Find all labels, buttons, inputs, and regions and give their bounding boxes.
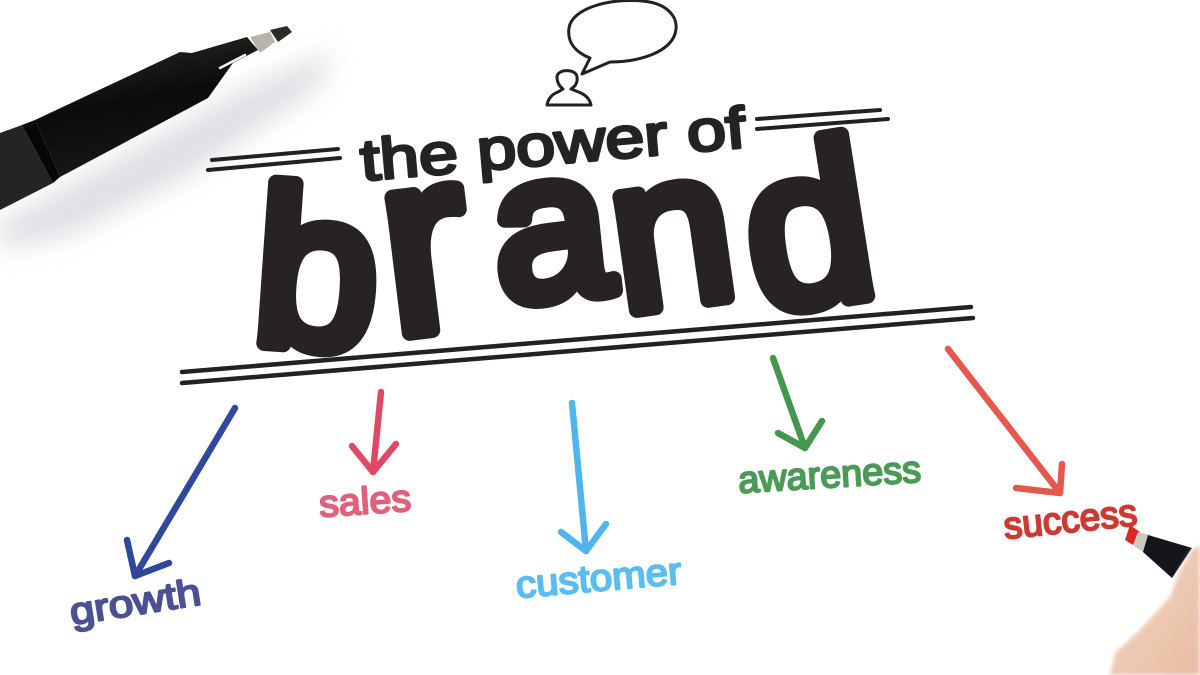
branch: awareness: [737, 358, 922, 502]
heading: the power of: the power of: [358, 95, 749, 194]
branch: sales: [318, 392, 412, 526]
label: growth: growth: [67, 572, 204, 634]
title: brand: a: [480, 105, 620, 348]
arrow: customer: [561, 403, 606, 551]
icon: person with speech bubble: [547, 0, 676, 105]
label: sales: sales: [318, 478, 412, 526]
heading rules right of subtitle: [757, 110, 888, 129]
label: customer: customer: [514, 551, 684, 607]
branch: customer: [514, 403, 684, 607]
icon: hand holding red-tipped pen: [1110, 525, 1200, 675]
title: brand: d: [726, 92, 889, 360]
label: awareness: awareness: [737, 449, 922, 502]
icon: black marker pen, top left: [0, 26, 335, 250]
arrow: growth: [127, 408, 235, 576]
branch: success: [948, 349, 1139, 548]
title: brand: [247, 92, 889, 398]
title: brand: r: [363, 92, 484, 390]
double underline below title: [182, 307, 973, 383]
label: success: success: [1002, 492, 1139, 548]
arrow: success: [948, 349, 1062, 493]
branch: growth: [67, 408, 235, 634]
title: brand: b: [247, 142, 387, 398]
heading rules left of subtitle: [208, 149, 340, 170]
arrow: awareness: [773, 358, 822, 448]
arrow: sales: [352, 392, 396, 472]
title: brand: n: [595, 101, 747, 358]
